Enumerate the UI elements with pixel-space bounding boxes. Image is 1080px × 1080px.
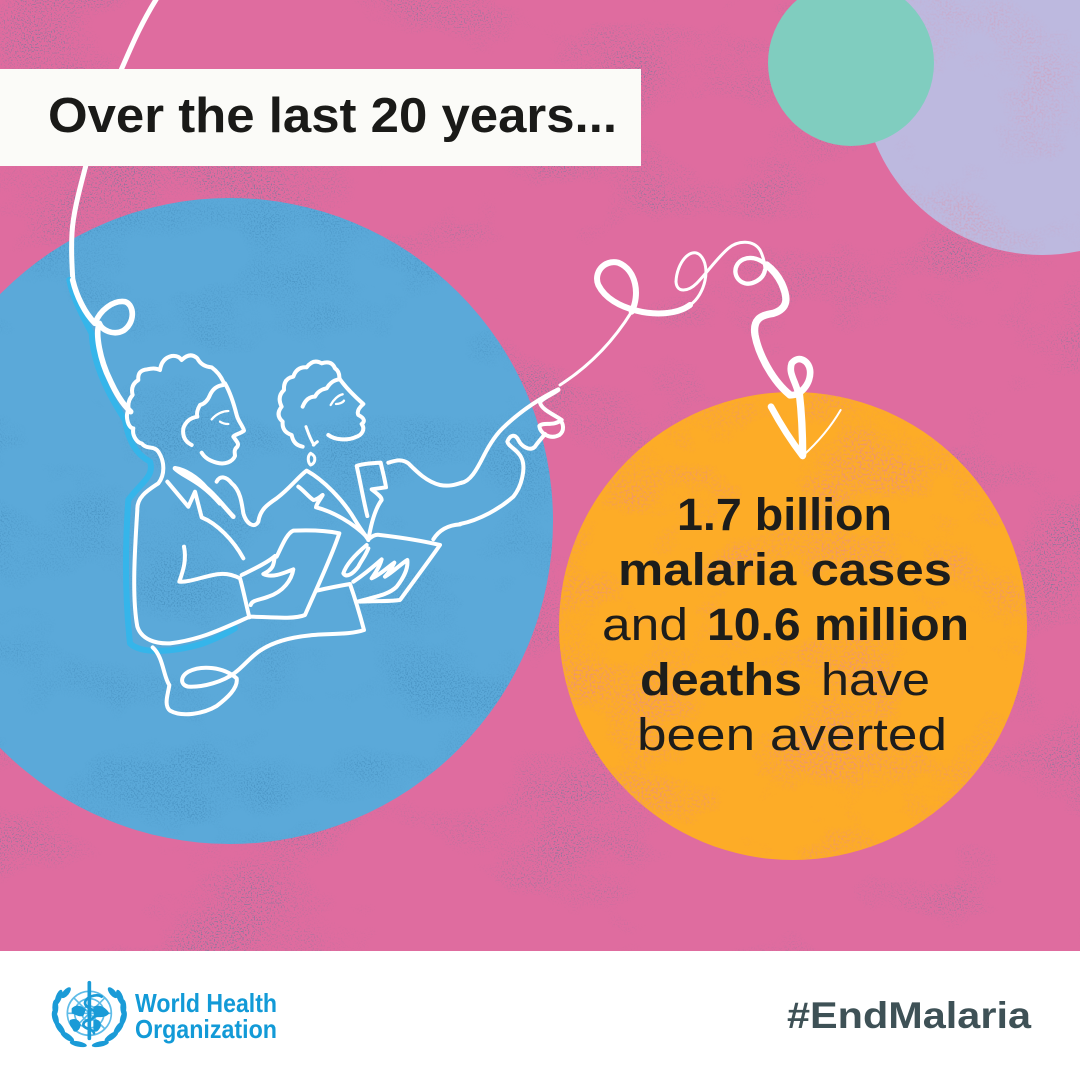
staff and serpent [83,983,102,1038]
text: statistics callout: have [821,654,930,705]
blue circle [0,198,553,845]
lower arm and legs [153,584,364,714]
laurel wreath [50,986,128,1048]
ribbon thin part [560,312,632,385]
first figure hair [128,355,224,411]
illustration: two health workers with tablets [69,280,462,714]
text: statistics callout [602,489,969,760]
pointing arm, lower [433,524,460,539]
logo wordmark: Organization [135,1014,277,1044]
logo wordmark [135,988,277,1044]
second figure hairline [303,379,339,407]
first figure eyes [212,411,228,424]
icon: WHO emblem [50,983,128,1048]
ribbon thin oval and crossing [676,242,765,305]
footer band [0,951,1080,1080]
text: statistics callout: 10.6 million [707,599,969,650]
earring [306,427,317,465]
ribbon small ring [735,258,767,284]
back of first figure [127,410,248,643]
phone and pen [357,463,386,540]
illustration: pointing hand, spiralling ribbon and arrow [460,242,841,524]
upper line of arm and pointing finger [461,389,558,483]
first figure collar [175,468,233,517]
first hand [242,556,293,605]
second figure eyes [331,394,344,405]
ribbon first loop [597,262,690,313]
first tablet [250,530,339,618]
second figure face [328,378,364,439]
hashtag: #EndMalaria [787,995,1031,1036]
lavender circle [862,0,1080,255]
continents [70,1006,109,1032]
text: statistics callout: and [602,599,688,650]
fingers [539,390,563,437]
text: statistics callout: deaths [640,654,802,705]
globe [67,991,111,1035]
heading: Over the last 20 years... [48,89,617,143]
second figure collar [298,487,367,537]
first figure hairline [183,385,223,445]
second figure hair [279,362,339,447]
ribbon third loop [790,359,810,395]
arrow head, right [803,410,841,456]
first figure sleeve [179,547,249,617]
ribbon second loop [755,265,790,395]
logo wordmark: World Health [135,988,277,1018]
second hand [343,545,407,602]
orange circle [559,392,1027,860]
teal circle [768,0,934,146]
pointing arm, upper [388,460,462,486]
second tablet [360,535,440,602]
text: statistics callout: malaria cases [618,544,952,595]
arrow shaft [799,393,803,455]
first figure face [202,383,244,463]
header banner [0,69,641,166]
text: statistics callout: 1.7 billion [677,489,892,540]
arrow head, left [771,407,803,456]
illustration: line from top into the figures [72,0,157,282]
loop near the top [73,280,132,412]
cyan shadow [69,280,235,651]
lower line of arm [460,434,545,524]
text: statistics callout: been averted [637,709,947,760]
